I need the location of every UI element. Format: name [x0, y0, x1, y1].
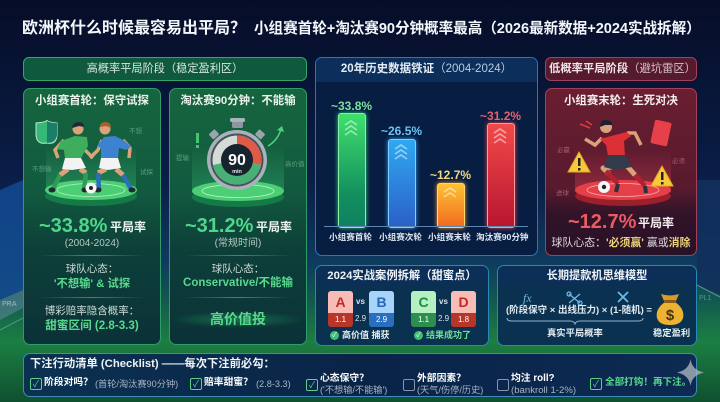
item: odds: (2.8-3.3) — [256, 379, 291, 389]
item: external factors — [403, 372, 483, 395]
result: success: 结果成功了 — [426, 330, 471, 340]
panel: low probability header: 低概率平局阶段（避坑雷区） — [549, 63, 696, 75]
card heading: 小组赛首轮：保守试探 — [35, 95, 149, 107]
bar chart — [324, 99, 529, 242]
team mindset: 球队心态： — [66, 263, 118, 275]
bar values: ~33.8% — [331, 99, 372, 113]
match: C vs D: 1.1 — [418, 315, 429, 324]
bar: first round — [338, 113, 366, 228]
illustration: two players: 试探 — [140, 167, 154, 176]
item: odds — [190, 376, 291, 390]
draw rate stat: 平局率 — [256, 220, 292, 234]
icon: stopwatch — [176, 118, 305, 207]
item: external factors: 外部因素？ — [417, 373, 466, 384]
panel: long-term model — [497, 265, 697, 346]
draw rate stat: ~12.7% — [568, 211, 636, 233]
bar values: ~12.7% — [430, 168, 471, 182]
panel: high probability header: 高概率平局阶段（稳定盈利区） — [87, 63, 243, 75]
item: stage — [30, 376, 178, 390]
bar chevrons — [324, 120, 528, 227]
match: C vs D: vs — [439, 297, 448, 306]
draw rate stat — [568, 211, 674, 233]
stadium background: PL1 — [699, 295, 712, 302]
odds note — [45, 305, 139, 332]
panel: group stage first round — [23, 88, 161, 345]
panel: group stage final round — [545, 88, 697, 256]
match: C vs D — [411, 291, 476, 327]
panel: knockout 90 minutes — [169, 88, 307, 345]
match: A vs B: B — [376, 294, 387, 310]
icon: stopwatch: min — [232, 169, 243, 175]
item: flat stake: 均注 roll? — [511, 373, 555, 384]
match: C vs D: 1.8 — [458, 315, 469, 324]
case heading — [316, 266, 488, 286]
match: A vs B: vs — [356, 297, 365, 306]
title: 欧洲杯什么时候最容易出平局？ 小组赛首轮+淘汰赛90分钟概率最高（2026最新数据+2024实战拆解） — [22, 20, 701, 37]
item: stage: (首轮/淘汰赛90分钟) — [95, 379, 178, 389]
panel: 2024 case study — [315, 265, 489, 346]
chart heading: 20年历史数据铁证（2004-2024） — [341, 63, 512, 75]
team mindset: 球队心态： — [212, 263, 264, 275]
bar values — [331, 99, 521, 182]
true probability label: 真实平局概率 — [547, 328, 603, 338]
match: A vs B: 2.9 — [355, 314, 366, 323]
item: odds: 赔率甜蜜？ — [204, 377, 253, 388]
match: A vs B: A — [335, 294, 346, 310]
match: A vs B — [328, 291, 394, 327]
illustration: running player: 进球 — [556, 188, 570, 197]
bar labels: 小组赛次轮 — [379, 232, 422, 242]
item: odds: ✓ — [193, 379, 199, 389]
draw rate stat — [185, 215, 292, 237]
panel: betting checklist — [23, 353, 697, 397]
team mindset: 球队心态：'必须赢' 赢或消除 — [552, 237, 690, 249]
draw rate stat: ~31.2% — [185, 215, 253, 237]
team mindset — [54, 263, 130, 290]
panel: 20-year data chart — [315, 57, 538, 256]
chart heading — [316, 58, 537, 82]
bar values: ~31.2% — [480, 109, 521, 123]
bar labels: 淘汰赛90分钟 — [476, 232, 529, 242]
item: all checked — [590, 376, 691, 390]
result: high value: 高价值 捕获 — [342, 330, 390, 340]
item: external factors: (天气/伤停/历史) — [417, 385, 483, 395]
formula brace — [506, 318, 644, 325]
item: flat stake — [497, 372, 576, 396]
illustration: two players: 不想 — [129, 126, 142, 135]
item: stage: 阶段对吗？ — [44, 377, 93, 388]
draw rate stat: ~33.8% — [39, 215, 107, 237]
item: mindset: ✓ — [309, 380, 315, 390]
draw rate stat — [39, 215, 146, 237]
team mindset: Conservative/不能输 — [183, 277, 293, 289]
panel: high probability header — [23, 57, 307, 81]
stable profit label: 稳定盈利 — [653, 328, 690, 338]
bar: second round — [388, 139, 416, 228]
match: C vs D: D — [458, 294, 469, 310]
item: mindset — [306, 372, 387, 395]
model heading — [498, 266, 696, 286]
icon: stopwatch: 提输 — [176, 153, 190, 162]
case heading: 2024实战案例拆解（甜蜜点） — [327, 270, 477, 282]
bar: final round — [437, 183, 465, 228]
item: all checked: ✓ — [593, 379, 599, 389]
regular time note: (常规时间) — [215, 238, 261, 249]
formula icons: fx — [523, 291, 532, 305]
model heading: 长期提款机思维模型 — [547, 270, 647, 282]
formula text: (阶段保守 × 出线压力) × (1-随机) = — [506, 305, 652, 316]
icon: stopwatch: 高价值 — [285, 159, 305, 168]
illustration: two players: 不想输 — [32, 164, 52, 173]
icon: money bag — [656, 294, 684, 325]
bar: knockout — [487, 123, 515, 228]
illustration: running player: 必赢 — [557, 145, 570, 154]
high value badge: 高价值投 — [210, 311, 266, 327]
result: high value: ✓ — [332, 332, 337, 339]
match: C vs D: C — [418, 294, 429, 310]
bar labels: 小组赛首轮 — [329, 232, 372, 242]
checklist heading: 下注行动清单 (Checklist) ——每次下注前必勾： — [30, 358, 275, 370]
item: all checked: 全部打钩！再下注。 — [605, 377, 691, 388]
bar values: ~26.5% — [381, 124, 422, 138]
odds note: 博彩赔率隐含概率： — [45, 305, 139, 317]
item: mindset: 心态保守？ — [320, 373, 369, 384]
icon: stopwatch: 90 — [228, 152, 246, 169]
stadium background: PRA — [2, 301, 17, 308]
bar labels — [329, 232, 529, 242]
team mindset: '不想输' & 试探 — [54, 278, 130, 290]
odds note: 甜蜜区间 (2.8-3.3) — [45, 319, 139, 332]
match: A vs B: 1.1 — [335, 315, 346, 324]
match: C vs D: 2.9 — [438, 314, 449, 323]
high value badge — [170, 311, 306, 328]
illustration: running player — [556, 120, 686, 206]
draw rate stat: 平局率 — [638, 216, 674, 230]
bar labels: 小组赛末轮 — [428, 232, 471, 242]
illustration: running player: 必须 — [672, 156, 686, 165]
card heading: 淘汰赛90分钟：不能输 — [180, 95, 296, 107]
date range: (2004-2024) — [65, 238, 119, 249]
match: A vs B: 2.9 — [376, 315, 387, 324]
card heading: 小组赛末轮：生死对决 — [564, 95, 678, 107]
formula icons — [523, 291, 629, 305]
icon: money bag: $ — [666, 307, 675, 324]
result: success: ✓ — [416, 332, 421, 339]
icon: sparkle — [677, 359, 704, 386]
illustration: two players — [32, 120, 154, 206]
item: mindset: ('不想输/不能输') — [320, 385, 387, 395]
draw rate stat: 平局率 — [110, 220, 146, 234]
item: flat stake: (bankroll 1-2%) — [511, 385, 576, 396]
team mindset — [183, 263, 293, 289]
panel: low probability header — [545, 57, 697, 81]
item: stage: ✓ — [33, 379, 39, 389]
